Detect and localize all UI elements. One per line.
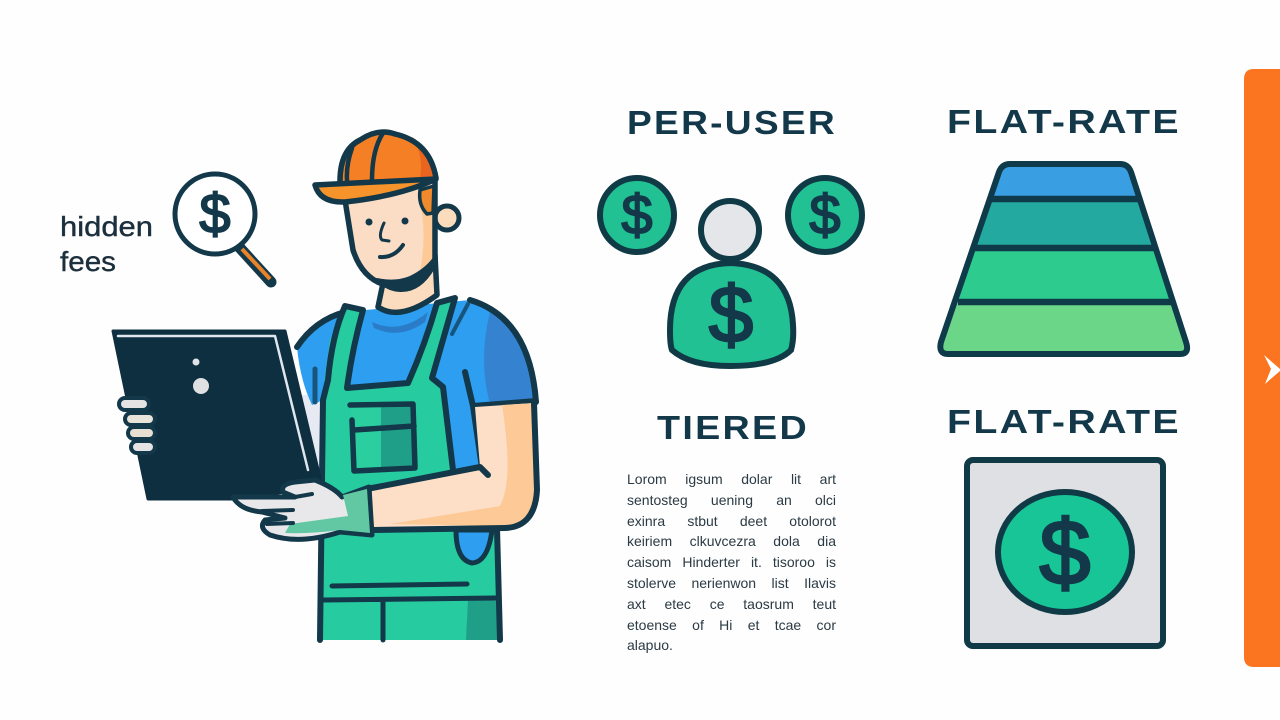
- icon: square with dollar coin: $: [1039, 502, 1091, 604]
- chart: tier pyramid: [940, 164, 1188, 354]
- left coin: [600, 178, 674, 252]
- backdrop behind tablet: [300, 395, 325, 480]
- glove: [233, 480, 372, 539]
- illustration: worker with tablet: [113, 132, 537, 640]
- text block: lorem paragraph: axt etec ce taosrum teut: [627, 596, 836, 612]
- overalls: [320, 298, 500, 640]
- right coin: $: [809, 183, 841, 246]
- user head: [701, 201, 759, 259]
- neck: [378, 255, 437, 312]
- user dollar: $: [709, 270, 753, 359]
- icon: magnifying glass with dollar: [175, 174, 271, 282]
- heading: per-user: PER-USER: [627, 104, 837, 141]
- arrow chevron: [1264, 355, 1280, 384]
- hanging blue pocket: [456, 530, 492, 563]
- text block: lorem paragraph: etoense of Hi et tcae cor: [627, 617, 836, 633]
- shirt: [297, 300, 536, 478]
- heading: flat-rate top: FLAT-RATE: [947, 103, 1181, 140]
- text block: lorem paragraph: caisom Hinderter it. tisoroo is: [627, 554, 836, 570]
- tablet: [113, 331, 320, 499]
- heading: tiered: TIERED: [657, 409, 809, 446]
- text block: lorem paragraph: exinra stbut deet otolorot: [627, 513, 836, 529]
- icon: magnifying glass with dollar: $: [199, 182, 231, 245]
- user body: [670, 263, 793, 366]
- arm: [372, 403, 537, 530]
- hard hat: [315, 132, 436, 202]
- icon: square with dollar coin: [967, 460, 1163, 646]
- right coin: [788, 178, 862, 252]
- head: [345, 180, 437, 291]
- ear: [435, 206, 459, 230]
- heading: flat-rate bottom: FLAT-RATE: [947, 403, 1181, 440]
- text block: lorem paragraph: sentosteg uening an olci: [627, 492, 836, 508]
- orange side panel: [1244, 69, 1280, 667]
- text block: lorem paragraph: [627, 471, 836, 653]
- label: hidden fees: hidden: [60, 211, 153, 242]
- text block: lorem paragraph: stolerve nerienwon list Ilavis: [627, 575, 836, 591]
- label: hidden fees: [60, 211, 153, 277]
- text block: lorem paragraph: alapuo.: [627, 637, 673, 653]
- pocket: [350, 404, 415, 471]
- icon: coins and user: [600, 178, 862, 366]
- text block: lorem paragraph: Lorom igsum dolar lit art: [627, 471, 836, 487]
- left coin: $: [621, 183, 653, 246]
- text block: lorem paragraph: keiriem clkuvcezra dola dia: [627, 533, 836, 549]
- label: hidden fees: fees: [60, 246, 116, 277]
- left hand fingers: [119, 398, 155, 453]
